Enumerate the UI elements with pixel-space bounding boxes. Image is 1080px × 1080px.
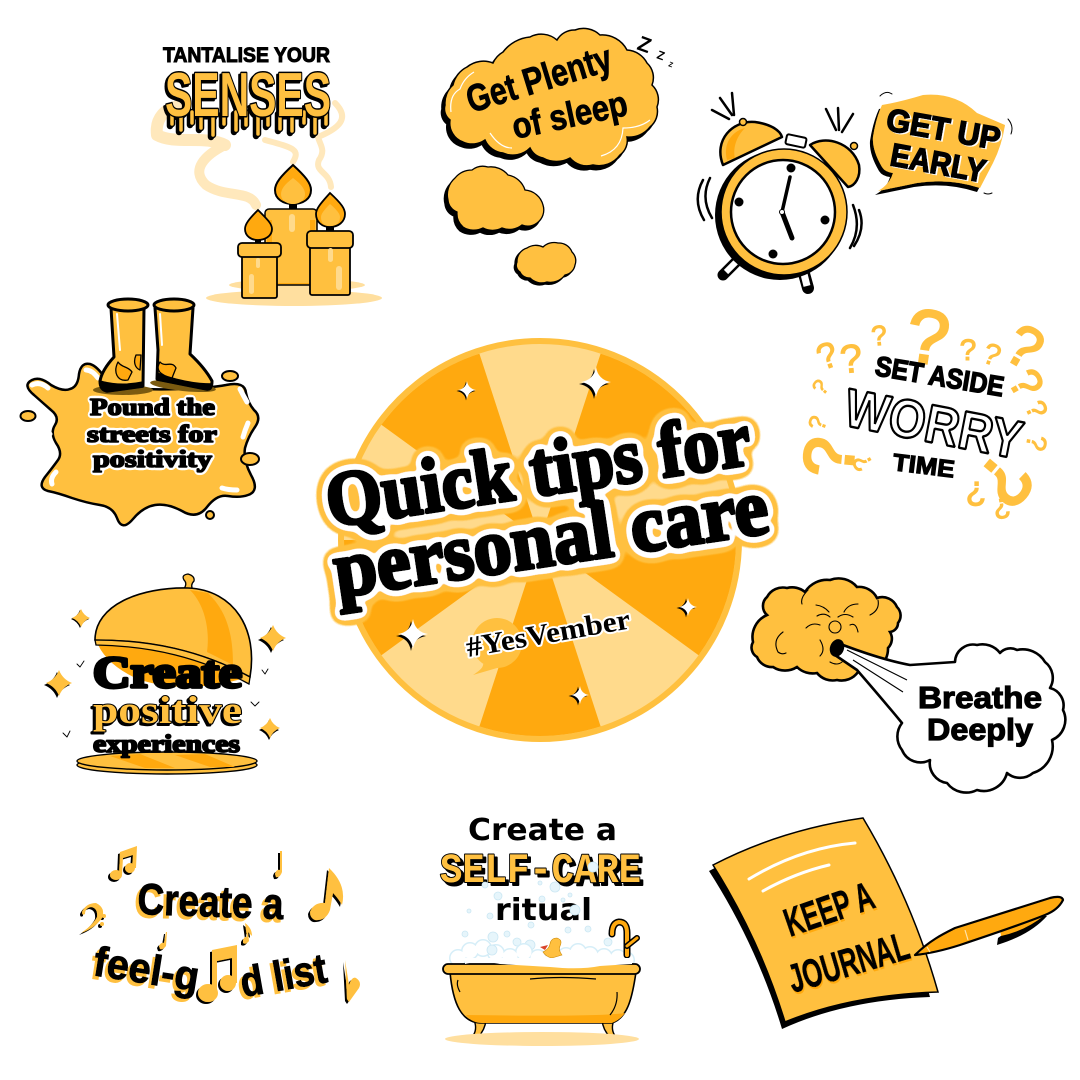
bath feet xyxy=(472,1020,616,1037)
droplets xyxy=(20,371,259,519)
heading text: Create a xyxy=(468,813,617,848)
question marks: ? xyxy=(992,492,1012,525)
cloche knob xyxy=(183,574,194,590)
tip: get plenty of sleep: of sleep xyxy=(508,82,631,147)
drippy word xyxy=(165,61,331,135)
tip: create a self-care ritual: ritual xyxy=(495,893,592,928)
tip: create a self-care ritual xyxy=(440,813,641,1046)
ground shadows xyxy=(229,279,365,291)
plate xyxy=(77,752,257,774)
hashtag YesVember: #YesVember xyxy=(464,604,633,664)
splat text xyxy=(87,395,217,473)
tip: create positive experiences xyxy=(44,574,286,774)
paper highlights xyxy=(749,843,855,891)
title xyxy=(320,395,774,615)
small thought cloud xyxy=(516,243,576,283)
bubble text: Breathe xyxy=(918,680,1042,715)
icon: rubber duck xyxy=(540,938,562,958)
tip: set aside worry time: TIME xyxy=(891,449,956,484)
question marks xyxy=(789,293,1055,525)
list text xyxy=(91,875,330,1006)
splat highlights xyxy=(32,370,248,490)
right candle xyxy=(307,193,353,295)
question marks: ? xyxy=(1019,396,1054,423)
question marks: ? xyxy=(838,337,864,382)
icon: zzz: Z xyxy=(655,48,667,63)
tap xyxy=(612,922,637,955)
bells xyxy=(720,118,859,187)
boot shadow xyxy=(93,385,153,395)
tip: get plenty of sleep xyxy=(444,28,674,283)
cloche interior xyxy=(96,640,248,687)
tip: keep a journal xyxy=(709,818,1063,1029)
icon: sparkles xyxy=(396,367,697,706)
speech bubble xyxy=(873,95,1005,191)
journal text: JOURNAL xyxy=(783,924,914,1002)
icon: wellington boots xyxy=(100,299,212,392)
question marks: ? xyxy=(870,319,888,352)
journal text xyxy=(779,874,914,1002)
tip: create a feel-good list xyxy=(81,846,360,1006)
paper xyxy=(713,818,938,1022)
question marks: ? xyxy=(1020,433,1053,453)
centre candle xyxy=(265,165,317,285)
question marks: ? xyxy=(811,333,844,378)
list text: feel-g xyxy=(91,937,203,1000)
question marks: ? xyxy=(807,375,834,400)
cloud text: Get Plenty xyxy=(461,38,617,122)
splat text: streets for xyxy=(87,422,217,448)
tip: get up early clock xyxy=(698,92,1012,288)
breath bubble xyxy=(832,644,1065,793)
cloud face xyxy=(776,590,878,664)
ground shadow xyxy=(445,1032,639,1046)
icon: zzz xyxy=(634,32,674,70)
splat xyxy=(27,364,258,525)
list text: Create a xyxy=(137,875,285,929)
cloche dome xyxy=(95,588,252,677)
tip: pound the streets xyxy=(20,299,259,525)
question marks: ? xyxy=(962,439,1049,521)
bubble text: EARLY xyxy=(888,136,989,189)
question marks: ? xyxy=(967,474,985,512)
bubble text: GET UP xyxy=(884,101,1003,157)
list text: d list xyxy=(236,944,330,1006)
left candle xyxy=(238,210,281,298)
splat text: Pound the xyxy=(90,395,215,421)
legs xyxy=(723,256,808,288)
question marks: ? xyxy=(901,293,955,383)
button xyxy=(785,134,807,148)
tip: tantalise your senses xyxy=(157,44,382,306)
drippy word: SENSES xyxy=(165,61,331,130)
tip: create positive experiences: experiences xyxy=(93,731,240,758)
bathtub xyxy=(450,972,636,1023)
soap bubbles xyxy=(462,862,612,950)
question marks: ? xyxy=(789,434,870,480)
bath rim xyxy=(443,964,640,974)
title: Quick tips for xyxy=(320,395,756,544)
icon: music notes xyxy=(81,846,360,1002)
question marks: ? xyxy=(994,311,1055,383)
clock markers xyxy=(734,164,830,258)
angry cloud xyxy=(752,578,901,681)
bubble vibration marks xyxy=(880,92,1012,194)
ring ticks xyxy=(698,93,862,248)
question marks: ? xyxy=(960,334,976,367)
central wheel xyxy=(341,341,739,739)
icon: pen xyxy=(915,897,1063,955)
tip: breathe deeply: Deeply xyxy=(927,712,1034,747)
tip: set aside worry time xyxy=(789,293,1055,525)
question marks: ? xyxy=(846,449,879,477)
icon: zzz: Z xyxy=(634,32,654,58)
smoke xyxy=(157,103,342,205)
tip: breathe deeply xyxy=(752,578,1065,793)
sparkles xyxy=(44,609,286,740)
medium thought cloud xyxy=(447,166,544,230)
big thought cloud xyxy=(444,28,658,166)
foam xyxy=(458,945,626,960)
breath lines xyxy=(847,650,907,692)
mouth xyxy=(827,637,847,659)
clock hands xyxy=(782,177,790,212)
foam edge xyxy=(465,958,632,968)
journal text: KEEP A xyxy=(779,874,880,946)
question marks: ? xyxy=(978,337,1005,374)
clock body xyxy=(715,150,845,280)
bubble text xyxy=(884,101,1003,189)
cloud highlights xyxy=(451,72,650,156)
icon: zzz: Z xyxy=(667,61,674,70)
title: personal care xyxy=(328,463,774,615)
splat text: positivity xyxy=(93,447,212,473)
tip: create a self-care ritual: SELF-CARE xyxy=(440,847,641,895)
heading text: TANTALISE YOUR xyxy=(163,44,330,67)
question marks: ? xyxy=(803,412,833,434)
paper shadow xyxy=(709,823,930,1029)
stacked text: Create xyxy=(93,648,242,697)
worry text: SET ASIDE xyxy=(873,350,1006,402)
question marks: ? xyxy=(999,361,1053,407)
tip: create positive experiences: positive xyxy=(93,689,242,732)
tip: set aside worry time: WORRY xyxy=(840,378,1028,471)
